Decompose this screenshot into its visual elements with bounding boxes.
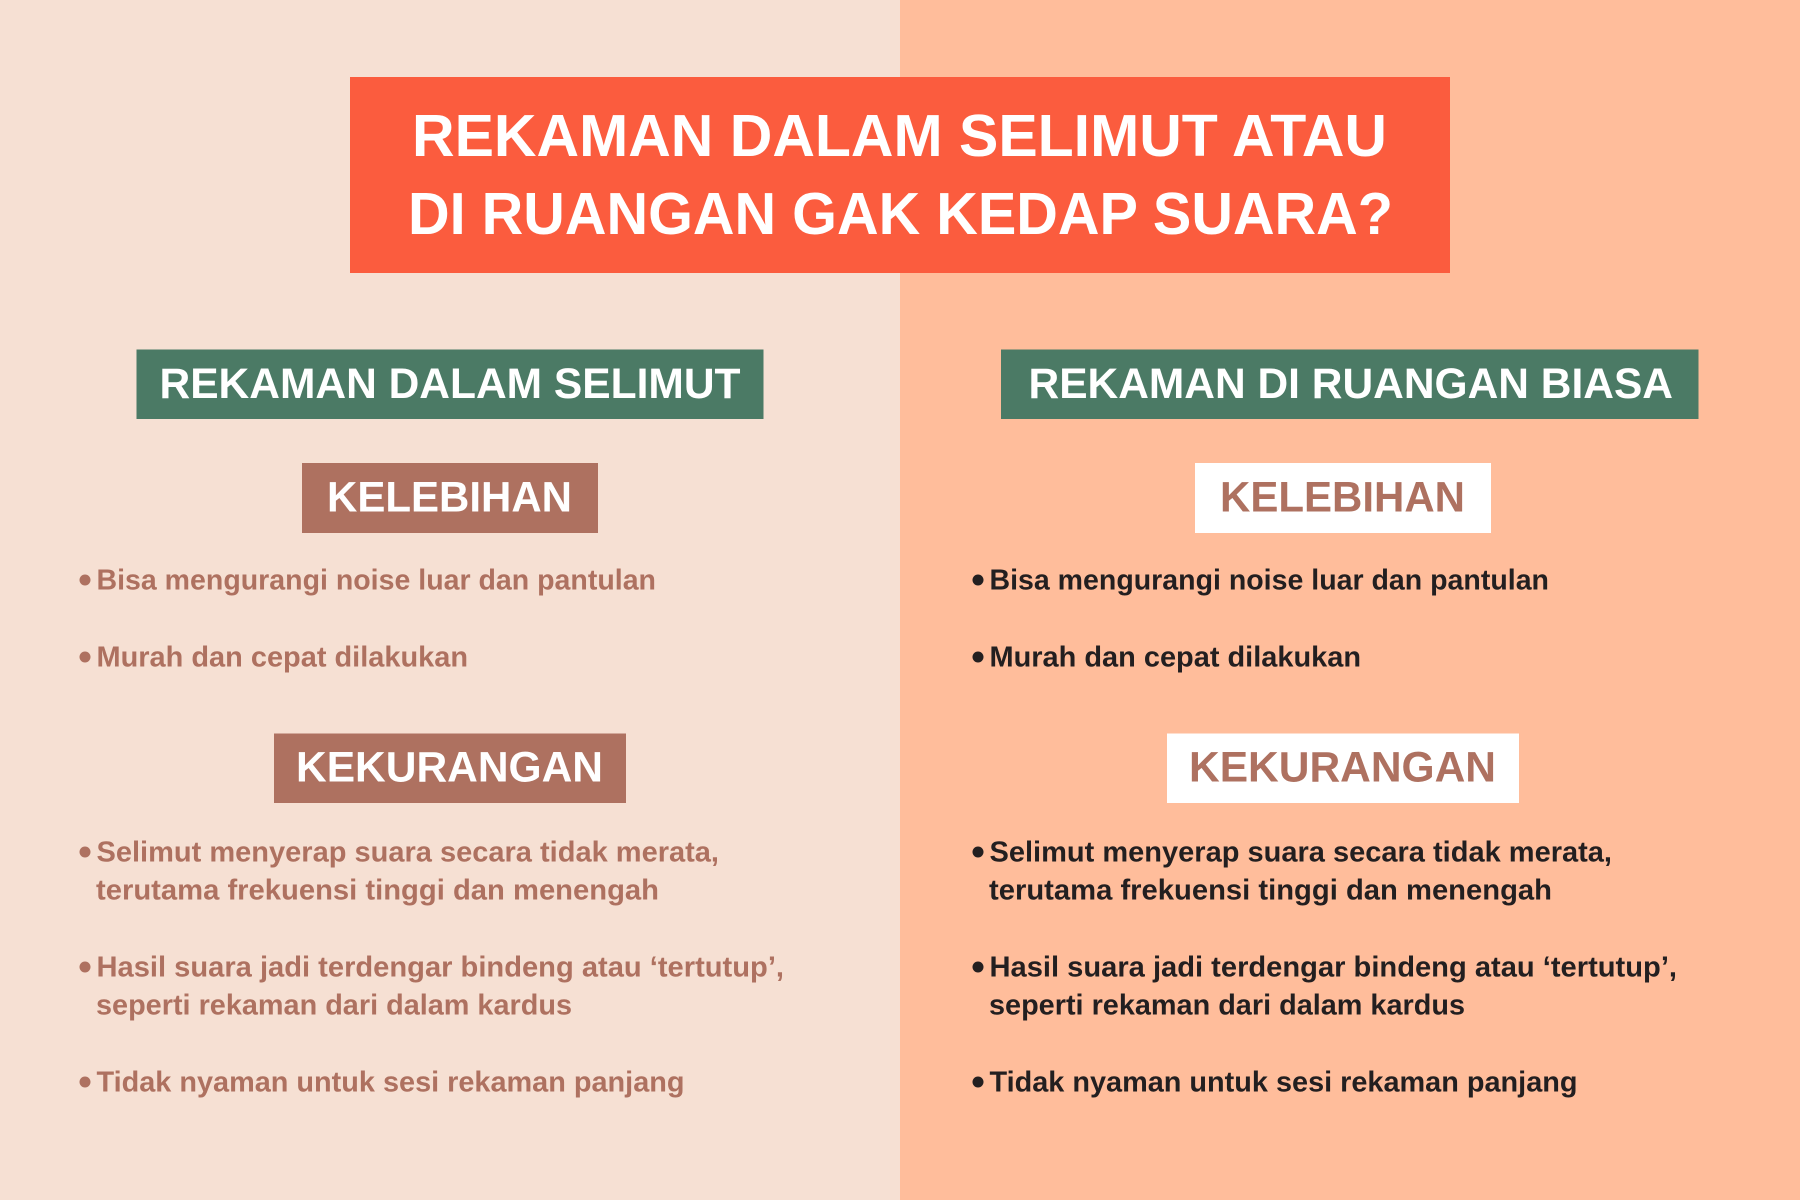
heading: kekurangan left xyxy=(274,734,626,803)
heading: kelebihan right: KELEBIHAN xyxy=(1220,474,1465,522)
list: kekurangan left: Tidak nyaman untuk sesi rekaman panjang xyxy=(96,1066,684,1098)
heading: rekaman dalam selimut xyxy=(136,350,764,419)
title xyxy=(350,77,1450,273)
heading: rekaman di ruangan biasa xyxy=(1001,350,1698,419)
panel: right background xyxy=(900,0,1800,1200)
heading: kekurangan right xyxy=(1167,734,1519,803)
list: kelebihan left: Murah dan cepat dilakukan xyxy=(96,642,468,674)
list: kekurangan left xyxy=(80,836,784,1098)
list: kekurangan left: Hasil suara jadi terdengar bindeng atau ‘tertutup’, xyxy=(96,952,784,984)
list: kekurangan left: seperti rekaman dari dalam kardus xyxy=(96,990,572,1022)
heading: kelebihan left xyxy=(302,463,598,533)
list: kelebihan left: Bisa mengurangi noise luar dan pantulan xyxy=(96,564,656,596)
heading: kelebihan right xyxy=(1195,463,1491,533)
panel: rekaman dalam selimut xyxy=(80,350,784,1098)
heading: rekaman di ruangan biasa: REKAMAN DI RUANGAN BIASA xyxy=(1028,360,1673,408)
panel: rekaman di ruangan biasa xyxy=(972,350,1698,1098)
list: kelebihan right: Murah dan cepat dilakukan xyxy=(990,642,1361,674)
list: kekurangan left: Selimut menyerap suara secara tidak merata, xyxy=(96,836,719,868)
heading: kelebihan left: KELEBIHAN xyxy=(327,474,572,522)
title: DI RUANGAN GAK KEDAP SUARA? xyxy=(408,181,1393,247)
heading: kekurangan right: KEKURANGAN xyxy=(1189,744,1496,792)
panel: left background xyxy=(0,0,900,1200)
list: kelebihan right: Bisa mengurangi noise luar dan pantulan xyxy=(990,564,1549,596)
list: kelebihan right xyxy=(972,564,1549,674)
list: kelebihan left xyxy=(80,564,656,674)
list: kekurangan right: seperti rekaman dari dalam kardus xyxy=(989,990,1465,1022)
title: REKAMAN DALAM SELIMUT ATAU xyxy=(412,103,1387,169)
list: kekurangan right: Selimut menyerap suara secara tidak merata, xyxy=(990,836,1612,868)
list: kekurangan right: Hasil suara jadi terdengar bindeng atau ‘tertutup’, xyxy=(990,952,1677,984)
heading: kekurangan left: KEKURANGAN xyxy=(296,744,603,792)
list: kekurangan left: terutama frekuensi tinggi dan menengah xyxy=(96,874,659,906)
heading: rekaman dalam selimut: REKAMAN DALAM SELIMUT xyxy=(160,360,740,408)
list: kekurangan right: terutama frekuensi tinggi dan menengah xyxy=(989,874,1552,906)
list: kekurangan right: Tidak nyaman untuk sesi rekaman panjang xyxy=(990,1066,1578,1098)
list: kekurangan right xyxy=(972,836,1677,1098)
